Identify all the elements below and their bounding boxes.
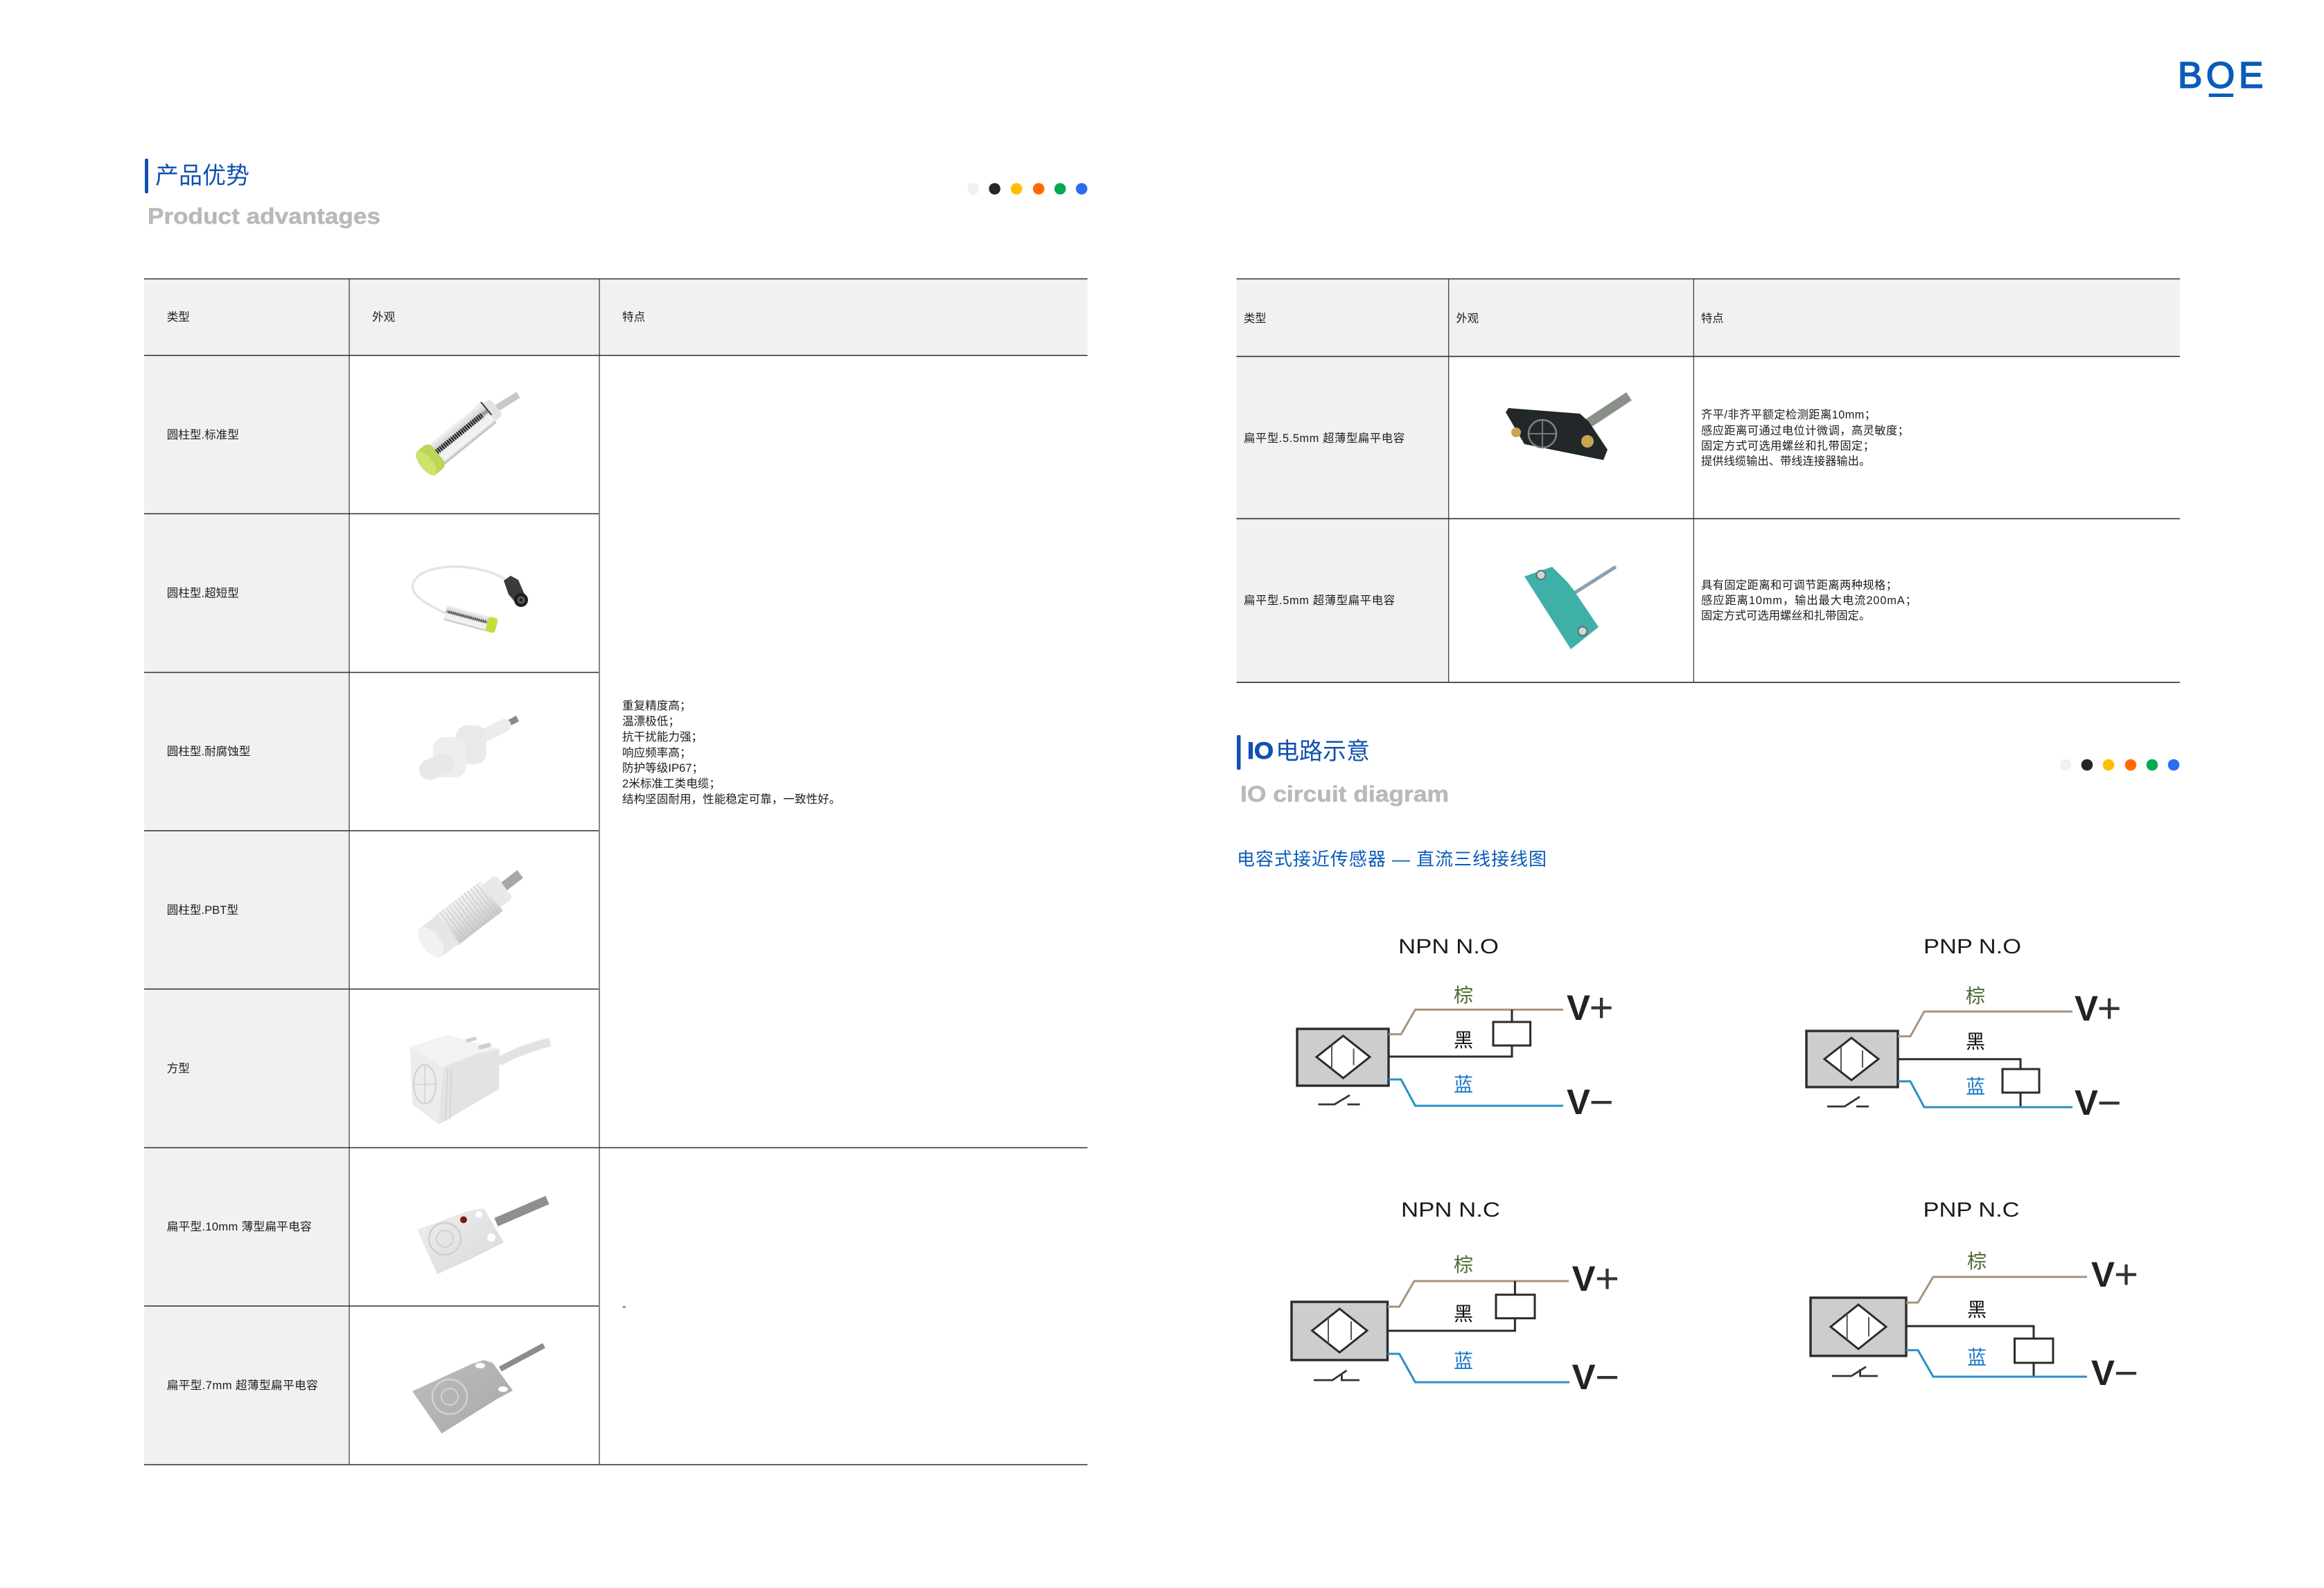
diagram: PNP N.O bbox=[1806, 935, 2122, 1126]
colour dots: right page bbox=[2060, 759, 2179, 770]
row labels: left: 方型 bbox=[167, 1061, 190, 1075]
diagram: PNP N.O: 黑 bbox=[1966, 1031, 1985, 1052]
icon: corrosion resistant sensor bbox=[430, 718, 518, 777]
diagram: NPN N.C: + bbox=[1595, 1255, 1619, 1302]
row labels: right: 扁平型.5mm 超薄型扁平电容 bbox=[1244, 594, 1395, 607]
panel: right product table bbox=[1236, 279, 2180, 682]
diagram: NPN N.O: 棕 bbox=[1454, 985, 1473, 1006]
diagram: NPN N.O: V bbox=[1567, 1082, 1590, 1122]
panel: left product table bbox=[144, 279, 1088, 1465]
diagram: NPN N.C: 黑 bbox=[1454, 1303, 1473, 1325]
diagram: PNP N.O: + bbox=[2097, 985, 2122, 1032]
diagram: PNP N.C: PNP N.C bbox=[1924, 1199, 2019, 1221]
row labels: left: 圆柱型.PBT型 bbox=[167, 903, 238, 917]
row labels: left: 圆柱型.耐腐蚀型 bbox=[167, 745, 250, 758]
feature text block: 2米标准工类电缆； bbox=[622, 777, 721, 790]
diagram: NPN N.O bbox=[1297, 935, 1614, 1125]
row labels: left: 扁平型.7mm 超薄型扁平电容 bbox=[167, 1379, 318, 1392]
diagram: PNP N.O: − bbox=[2097, 1079, 2122, 1126]
icon: 10mm flat sensor bbox=[417, 1200, 547, 1274]
diagram: PNP N.C: + bbox=[2114, 1251, 2138, 1298]
feature text: 5mm: 固定方式可选用螺丝和扎带固定。 bbox=[1701, 610, 1870, 622]
heading: IO电路示意 bbox=[1237, 735, 1370, 770]
feature text block: 防护等级IP67； bbox=[622, 761, 703, 775]
row labels: right bbox=[1244, 432, 1405, 607]
icon: square sensor bbox=[410, 1035, 550, 1124]
diagram: PNP N.C bbox=[1811, 1199, 2138, 1396]
subheading: IO circuit diagram: IO circuit diagram bbox=[1240, 782, 1449, 806]
feature text block bbox=[622, 699, 840, 806]
feature text block: 结构坚固耐用，性能稳定可靠，一致性好。 bbox=[622, 793, 840, 806]
feature text: 5mm bbox=[1701, 579, 1917, 622]
row labels: left: 圆柱型.标准型 bbox=[167, 428, 239, 441]
diagram: NPN N.C: V bbox=[1572, 1259, 1596, 1298]
row labels: right: 扁平型.5.5mm 超薄型扁平电容 bbox=[1244, 432, 1405, 445]
icon: ultra short sensor with connector bbox=[413, 567, 528, 633]
diagram: NPN N.C: NPN N.C bbox=[1401, 1199, 1500, 1221]
section title: wiring diagram: 电容式接近传感器 — 直流三线接线图 bbox=[1237, 849, 1547, 870]
diagram: NPN N.C bbox=[1292, 1199, 1619, 1400]
table header: right: 特点 bbox=[1701, 312, 1724, 325]
colour dots: left page bbox=[967, 183, 1087, 195]
icon: standard cylindrical sensor bbox=[412, 395, 518, 479]
feature text: dash: - bbox=[622, 1300, 626, 1313]
feature text: 5.5mm: 固定方式可选用螺丝和扎带固定； bbox=[1701, 440, 1874, 452]
diagram: NPN N.C: 蓝 bbox=[1454, 1350, 1473, 1372]
diagram: NPN N.O: NPN N.O bbox=[1398, 935, 1499, 958]
diagram: PNP N.C: V bbox=[2091, 1255, 2115, 1294]
diagram: PNP N.C: 棕 bbox=[1967, 1251, 1987, 1272]
table header: left: 外观 bbox=[372, 310, 396, 324]
feature text: 5.5mm: 感应距离可通过电位计微调，高灵敏度； bbox=[1701, 424, 1909, 437]
diagram: PNP N.O: 棕 bbox=[1966, 985, 1985, 1007]
table header: left bbox=[167, 310, 645, 324]
feature text block: 重复精度高； bbox=[622, 699, 692, 712]
table header: left: 类型 bbox=[167, 310, 190, 324]
diagram: PNP N.C: 蓝 bbox=[1967, 1347, 1987, 1368]
subheading: Product advantages: Product advantages bbox=[148, 204, 380, 229]
heading: 产品优势: 产品优势 bbox=[155, 163, 249, 189]
feature text block: 响应频率高； bbox=[622, 746, 692, 759]
icon: 5.5mm black flat sensor bbox=[1506, 396, 1629, 460]
heading: IO电路示意: IO bbox=[1247, 738, 1274, 764]
diagram: PNP N.O: 蓝 bbox=[1966, 1076, 1985, 1097]
feature text block: 温漂极低； bbox=[622, 715, 680, 727]
diagram: PNP N.O: PNP N.O bbox=[1924, 935, 2021, 958]
diagram: NPN N.C: − bbox=[1595, 1354, 1619, 1400]
diagram: PNP N.O: V bbox=[2075, 989, 2098, 1028]
icon: 7mm flat sensor bbox=[412, 1346, 544, 1433]
icon: 5mm teal flat sensor bbox=[1524, 567, 1616, 649]
feature text: 5mm: 具有固定距离和可调节距离两种规格； bbox=[1701, 579, 1897, 592]
row labels: left: 扁平型.10mm 薄型扁平电容 bbox=[167, 1220, 312, 1233]
diagram: PNP N.C: 黑 bbox=[1967, 1299, 1987, 1321]
row labels: left bbox=[167, 428, 318, 1392]
diagram: NPN N.O: 黑 bbox=[1454, 1030, 1473, 1051]
table header: right: 类型 bbox=[1244, 312, 1267, 325]
table header: left: 特点 bbox=[622, 310, 645, 324]
feature text: 5.5mm bbox=[1701, 409, 1909, 468]
heading: 产品优势 bbox=[145, 159, 249, 193]
feature text: 5.5mm: 齐平/非齐平额定检测距离10mm； bbox=[1701, 409, 1876, 421]
diagram: PNP N.C: − bbox=[2114, 1350, 2138, 1396]
diagram: NPN N.O: − bbox=[1590, 1079, 1614, 1125]
row labels: left: 圆柱型.超短型 bbox=[167, 586, 239, 600]
feature text: 5.5mm: 提供线缆输出、带线连接器输出。 bbox=[1701, 455, 1870, 468]
diagram: NPN N.C: 棕 bbox=[1454, 1254, 1473, 1276]
icon: PBT cylindrical sensor bbox=[412, 859, 531, 962]
heading: IO电路示意: 电路示意 bbox=[1276, 739, 1370, 765]
diagram: NPN N.O: 蓝 bbox=[1454, 1074, 1473, 1095]
diagram: PNP N.C: V bbox=[2091, 1353, 2115, 1393]
diagram: NPN N.C: V bbox=[1572, 1357, 1596, 1397]
feature text block: 抗干扰能力强； bbox=[622, 730, 703, 743]
feature text: 5mm: 感应距离10mm，输出最大电流200mA； bbox=[1701, 594, 1917, 607]
diagram: PNP N.O: V bbox=[2075, 1083, 2098, 1122]
logo: BOE: BOE bbox=[2178, 55, 2263, 96]
table header: right bbox=[1244, 312, 1724, 325]
diagram: NPN N.O: V bbox=[1567, 988, 1590, 1027]
table header: right: 外观 bbox=[1456, 312, 1479, 325]
diagram: NPN N.O: + bbox=[1590, 985, 1614, 1031]
